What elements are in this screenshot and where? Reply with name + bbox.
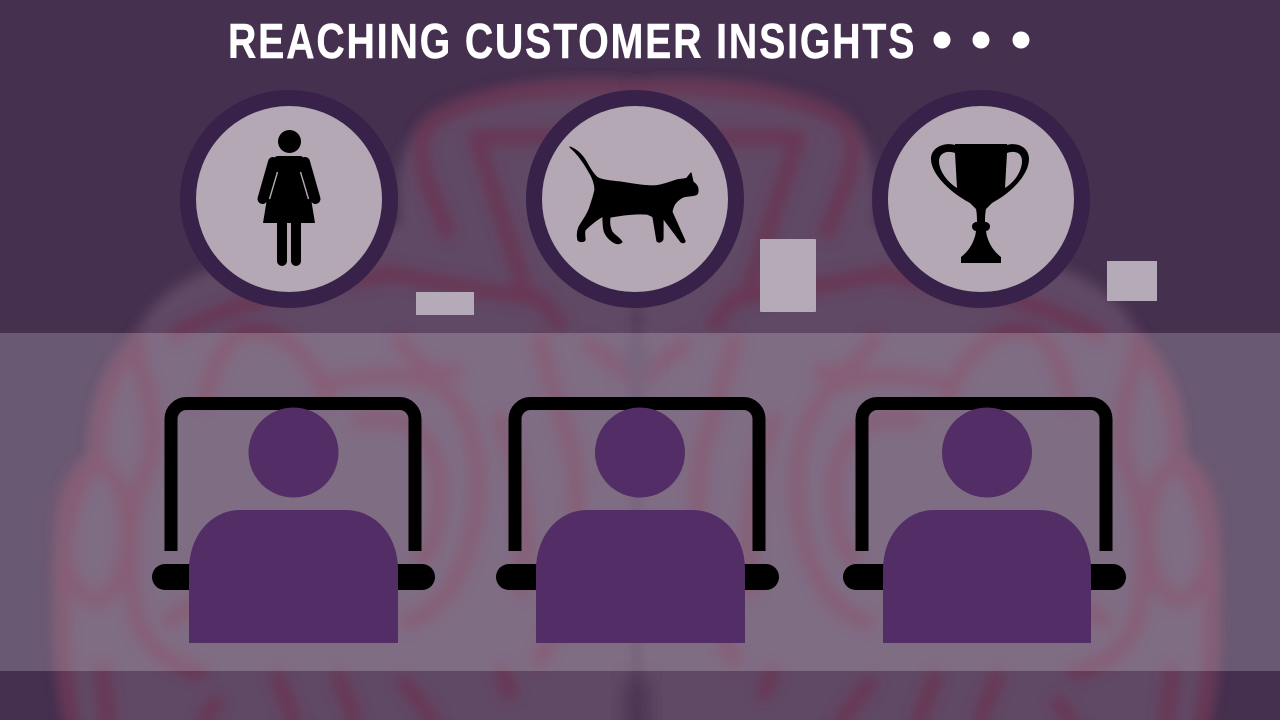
person at desk 2 [496,404,779,643]
person at desk 3 [843,404,1126,643]
light band panel [0,333,1280,671]
bar 1 [416,292,474,315]
icon: woman in circle [188,98,390,300]
title dots [934,32,1030,48]
icon: cat in circle [534,98,736,300]
bar 2 [760,239,816,312]
icon: trophy in circle [880,98,1082,300]
bar 3 [1107,261,1157,301]
person at desk 1 [152,404,435,643]
title: REACHING CUSTOMER INSIGHTS [228,15,914,69]
